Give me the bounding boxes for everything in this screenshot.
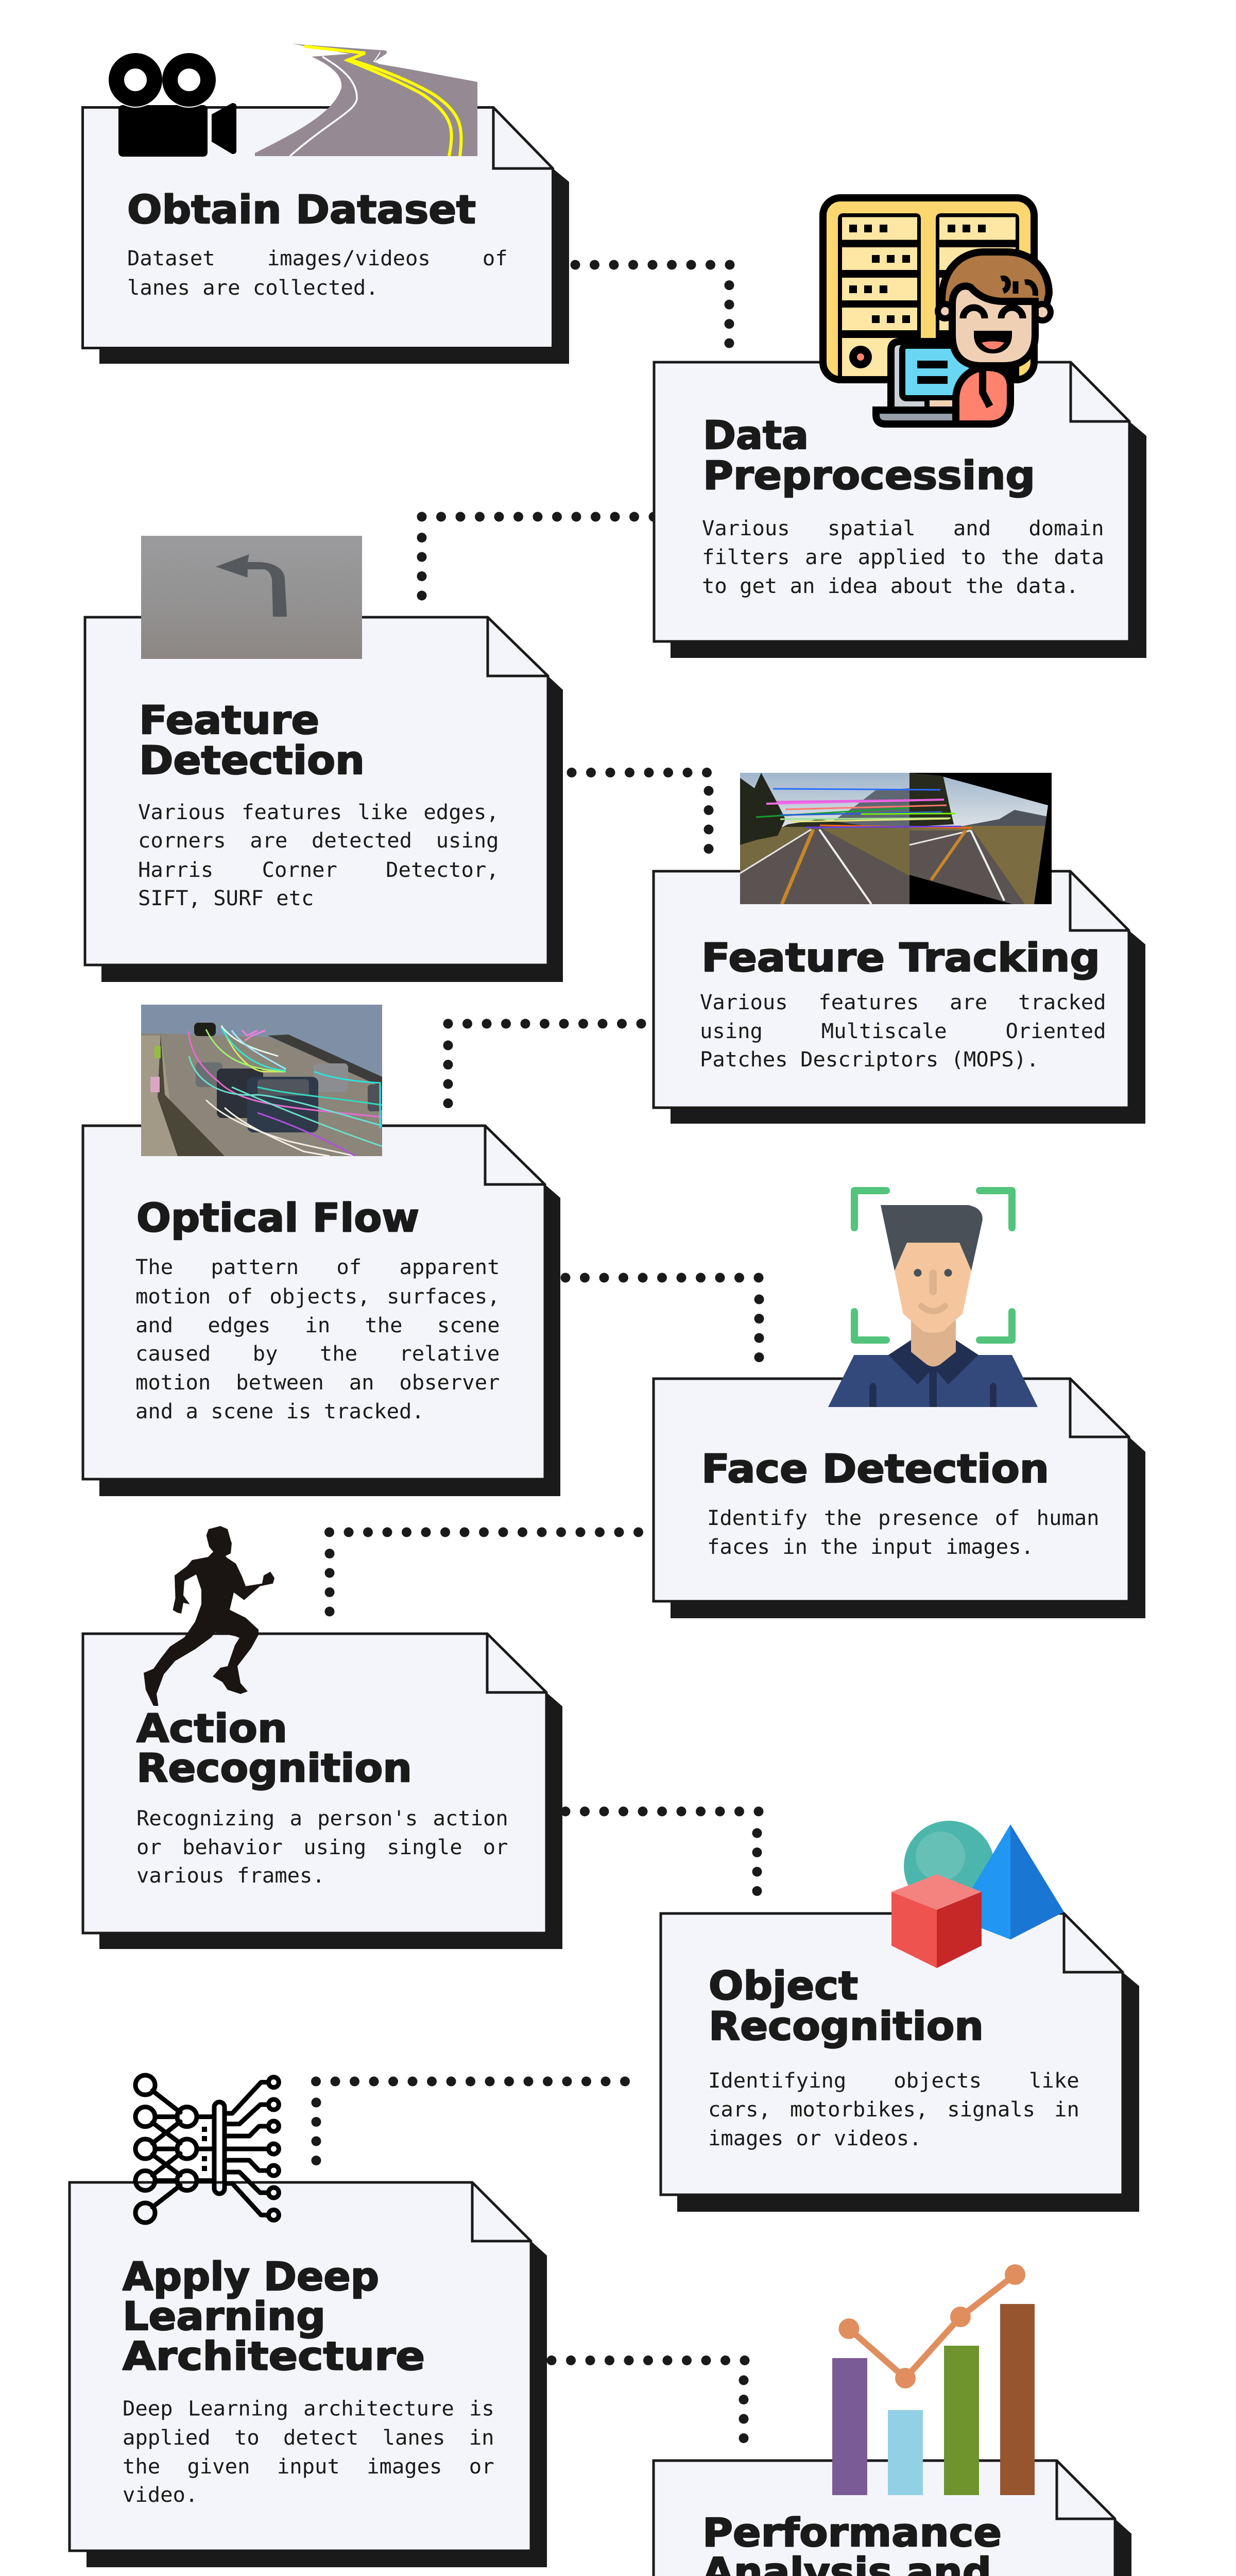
body text: applied to detect lanes in <box>123 2425 494 2450</box>
arrow: deep learning to performance analysis <box>552 2361 745 2439</box>
heading: Action <box>136 1705 287 1751</box>
heading <box>123 2253 425 2379</box>
body text <box>127 246 508 300</box>
body text: Recognizing a person's action <box>136 1806 508 1831</box>
body text: Harris Corner Detector, <box>138 857 499 882</box>
body text: The pattern of apparent <box>135 1255 500 1279</box>
card shape <box>654 1379 1145 1618</box>
body text: video. <box>123 2482 198 2507</box>
heading: Architecture <box>123 2333 425 2379</box>
body text <box>136 1806 508 1888</box>
body text: images or videos. <box>708 2126 922 2150</box>
heading: Object <box>709 1963 858 2008</box>
arrow: object recognition to deep learning <box>316 2081 625 2161</box>
card shape <box>654 2461 1131 2576</box>
body text: Dataset images/videos of <box>127 246 508 270</box>
panel: Apply Deep Learning Architecture <box>70 2075 547 2567</box>
body text: Identifying objects like <box>708 2068 1079 2093</box>
body text: lanes are collected. <box>127 275 379 300</box>
body text <box>135 1255 500 1423</box>
body text <box>138 800 499 910</box>
card shape <box>654 362 1146 658</box>
panel: Feature Tracking <box>654 773 1145 1124</box>
body text: Patches Descriptors (MOPS). <box>700 1047 1039 1072</box>
heading: Face Detection <box>701 1446 1049 1492</box>
icon: running person silhouette <box>144 1526 274 1706</box>
body text <box>707 1505 1099 1559</box>
body text: faces in the input images. <box>707 1534 1034 1559</box>
heading: Performance <box>702 2510 1002 2555</box>
heading: Feature Tracking <box>701 935 1100 980</box>
body text <box>708 2068 1079 2150</box>
heading: Optical Flow <box>136 1195 419 1241</box>
body text: Various features are tracked <box>700 990 1106 1014</box>
heading <box>136 1705 412 1791</box>
heading <box>702 2510 1002 2576</box>
arrow: feature tracking to optical flow <box>448 1024 661 1104</box>
heading: Preprocessing <box>703 452 1035 498</box>
heading: Recognition <box>136 1745 412 1791</box>
body text: Deep Learning architecture is <box>123 2396 494 2420</box>
body text: SIFT, SURF etc <box>138 886 314 910</box>
heading <box>709 1963 984 2049</box>
card shape <box>70 2182 547 2567</box>
arrow: action recognition to object recognition <box>565 1811 759 1892</box>
heading: Detection <box>139 737 365 783</box>
heading: Obtain Dataset <box>127 187 476 232</box>
icon: neural network circuit <box>135 2075 279 2223</box>
body text: and edges in the scene <box>135 1313 500 1337</box>
body text <box>702 516 1104 598</box>
body text: using Multiscale Oriented <box>700 1019 1106 1043</box>
body text: Various spatial and domain <box>702 516 1104 540</box>
body text: various frames. <box>136 1863 325 1888</box>
body text <box>700 990 1106 1072</box>
card shape <box>82 107 569 364</box>
card shape <box>661 1913 1139 2212</box>
icon: winding road <box>255 44 477 156</box>
heading <box>703 412 1035 498</box>
panel: Face Detection <box>654 1191 1145 1618</box>
body text: Various features like edges, <box>138 800 499 824</box>
arrow: face detection to action recognition <box>330 1532 639 1612</box>
body text: filters are applied to the data <box>702 545 1104 569</box>
image: feature matching road photos <box>740 773 1052 904</box>
heading: Recognition <box>709 2003 984 2049</box>
card shape <box>85 617 563 982</box>
arrow: feature detection to feature tracking <box>572 773 709 850</box>
panel: Optical Flow <box>83 1005 560 1496</box>
image: optical flow traffic photo <box>141 1005 382 1156</box>
panel: Action Recognition <box>83 1526 562 1949</box>
heading: Data <box>703 412 809 458</box>
body text: motion of objects, surfaces, <box>135 1284 500 1309</box>
body text: caused by the relative <box>135 1341 500 1366</box>
arrow: dataset to preprocessing <box>575 265 730 344</box>
heading: Learning <box>123 2293 325 2339</box>
card shape <box>83 1634 562 1949</box>
body text: motion between an observer <box>135 1370 500 1395</box>
icon: movie camera <box>108 52 236 157</box>
icon: face recognition portrait <box>828 1191 1038 1407</box>
body text: and a scene is tracked. <box>135 1399 424 1423</box>
heading: Apply Deep <box>123 2253 379 2299</box>
arrow: optical flow to face detection <box>565 1278 759 1358</box>
icon: person with server and laptop <box>823 198 1051 424</box>
panel: Feature Detection <box>85 536 563 982</box>
panel: Performance Analysis and Optimisation <box>654 2264 1131 2576</box>
body text: corners are detected using <box>138 828 499 853</box>
panel: Object Recognition <box>661 1821 1139 2212</box>
card shape <box>83 1126 560 1496</box>
heading: Feature <box>139 697 319 743</box>
body text: or behavior using single or <box>136 1835 508 1859</box>
body text: the given input images or <box>123 2454 494 2479</box>
card shape <box>654 871 1145 1124</box>
image: turn arrow on asphalt <box>141 536 362 659</box>
body text: Identify the presence of human <box>707 1505 1099 1530</box>
heading <box>139 697 365 783</box>
arrow: preprocessing to feature detection <box>422 517 654 596</box>
body text: to get an idea about the data. <box>702 573 1078 598</box>
body text: cars, motorbikes, signals in <box>708 2097 1079 2122</box>
panel: Data Preprocessing <box>654 198 1146 658</box>
icon: 3D shapes <box>891 1821 1064 1968</box>
body text <box>123 2396 494 2507</box>
chart: bars with trend line <box>832 2264 1035 2495</box>
panel: Obtain Dataset <box>82 44 569 364</box>
